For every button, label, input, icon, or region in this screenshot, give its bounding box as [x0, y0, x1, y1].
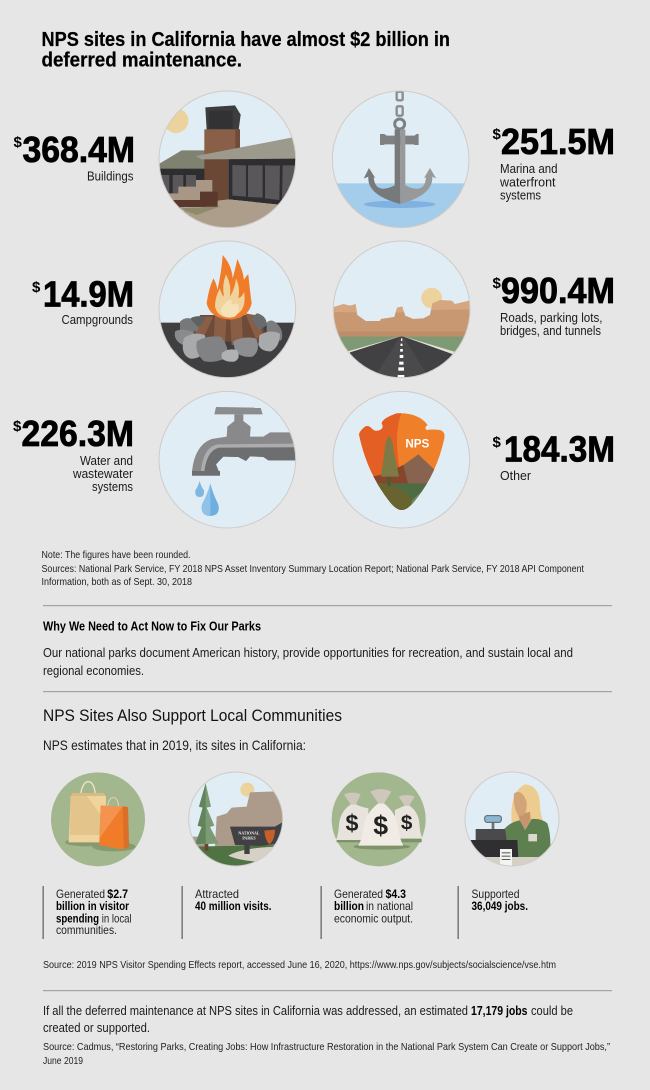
source: Cadmus: June 2019	[43, 1056, 83, 1067]
caption: economic output: Generated	[334, 887, 383, 901]
caption: visitor spending: Generated	[56, 887, 105, 901]
caption: visitor spending: $2.7	[107, 887, 128, 901]
panel: marina figure: waterfront	[499, 176, 556, 190]
panel: buildings figure: 368.4M	[22, 129, 135, 170]
panel: marina figure	[492, 121, 615, 202]
title: deferred maintenance.	[42, 48, 242, 72]
caption: visitor spending: in local	[102, 912, 132, 926]
source: Cadmus	[43, 1042, 611, 1067]
icon: national parks sign: NATIONAL	[238, 830, 260, 835]
caption: economic output: billion	[334, 899, 364, 913]
icon: NPS arrowhead: NPS	[405, 438, 430, 451]
panel: roads figure: bridges, and tunnels	[500, 324, 601, 338]
text block: why act body	[43, 646, 573, 678]
text block: jobs estimate: 17,179 jobs	[471, 1004, 528, 1018]
caption: visitor spending: billion in visitor	[56, 899, 129, 913]
caption: visits: Attracted	[195, 887, 239, 901]
icon: NPS arrowhead	[333, 391, 470, 528]
caption: visitor spending	[56, 887, 132, 937]
panel: marina figure: $	[492, 126, 502, 143]
panel: roads figure	[492, 270, 615, 338]
panel: other figure: Other	[500, 469, 531, 483]
icon: building	[157, 90, 300, 230]
note and sources: Sources: National Park Service, FY 2018 NPS Asset Inventory Summary Location Report; National Park Service, FY 2018 API Component	[42, 564, 584, 575]
icon: money bags: $	[373, 810, 388, 840]
panel: water figure: Water and	[80, 454, 133, 468]
panel: roads figure: 990.4M	[501, 270, 615, 311]
panel: campgrounds figure: $	[32, 279, 41, 296]
caption: economic output: $4.3	[386, 887, 406, 901]
panel: water figure	[13, 413, 134, 494]
text block: why act body: regional economies.	[43, 664, 144, 678]
icon: national parks sign: PARKS	[242, 835, 256, 840]
panel: campgrounds figure: Campgrounds	[62, 313, 133, 327]
panel: marina figure: 251.5M	[501, 121, 615, 162]
panel: water figure: $	[13, 418, 22, 435]
icon: anchor	[330, 90, 473, 230]
note and sources	[42, 550, 584, 588]
icon: money bags: $	[346, 810, 359, 836]
text block: jobs estimate: created or supported.	[43, 1021, 150, 1035]
caption: visits: 40 million visits.	[195, 899, 272, 913]
panel: campgrounds figure: 14.9M	[43, 274, 134, 314]
heading: why we need to act: Why We Need to Act Now to Fix Our Parks	[43, 620, 261, 634]
panel: marina figure: systems	[500, 188, 541, 202]
panel: other figure: $	[492, 434, 502, 451]
panel: other figure: 184.3M	[504, 428, 615, 470]
icon: money bags	[332, 772, 426, 866]
icon: national parks sign	[187, 770, 285, 868]
caption: economic output: economic output.	[334, 912, 413, 926]
text block: why act body: Our national parks document American history, provide opportunities for recreation, and sustain local and	[43, 646, 573, 660]
text block: jobs estimate	[43, 1004, 573, 1035]
icon: road	[332, 238, 475, 382]
caption: jobs: Supported	[472, 887, 520, 901]
text block: jobs estimate: could be	[531, 1004, 573, 1018]
caption: jobs: 36,049 jobs.	[472, 899, 528, 913]
panel: roads figure: $	[492, 275, 502, 292]
caption: visitor spending: spending	[56, 912, 99, 926]
caption: jobs	[472, 887, 528, 913]
panel: buildings figure: Buildings	[87, 170, 134, 184]
title	[42, 28, 450, 72]
panel: other figure	[492, 428, 615, 483]
icon: cashier	[463, 770, 562, 868]
heading: NPS sites also support: NPS Sites Also Support Local Communities	[43, 706, 342, 725]
icon: money bags: $	[401, 811, 413, 834]
panel: roads figure: Roads, parking lots,	[500, 311, 602, 325]
icon: campfire	[157, 238, 300, 381]
source: visitor spending: Source: 2019 NPS Visitor Spending Effects report, accessed June 16, 2020, https://www.nps.gov/subjects/socialscience/vse.htm	[43, 960, 556, 971]
panel: campgrounds figure	[32, 274, 134, 327]
note and sources: Information, both as of Sept. 30, 2018	[42, 577, 192, 588]
caption marker bars	[42, 886, 459, 939]
caption: economic output	[334, 887, 413, 926]
panel: water figure: wastewater	[72, 467, 133, 481]
caption: visitor spending: communities.	[56, 923, 117, 937]
icon: faucet	[157, 388, 300, 530]
panel: marina figure: Marina and	[500, 162, 558, 176]
text block: jobs estimate: If all the deferred maintenance at NPS sites in California was addressed, an estimated	[43, 1004, 468, 1018]
icon: shopping bags	[51, 772, 145, 866]
panel: water figure: systems	[92, 480, 133, 494]
panel: buildings figure	[14, 129, 135, 184]
caption: visits	[195, 887, 272, 913]
panel: water figure: 226.3M	[22, 413, 134, 454]
caption: economic output: in national	[366, 899, 413, 913]
title: NPS sites in California have almost $2 billion in	[42, 28, 450, 51]
panel: buildings figure: $	[14, 134, 22, 151]
note and sources: Note: The figures have been rounded.	[42, 550, 190, 561]
subheading: estimates: NPS estimates that in 2019, its sites in California:	[43, 737, 306, 753]
